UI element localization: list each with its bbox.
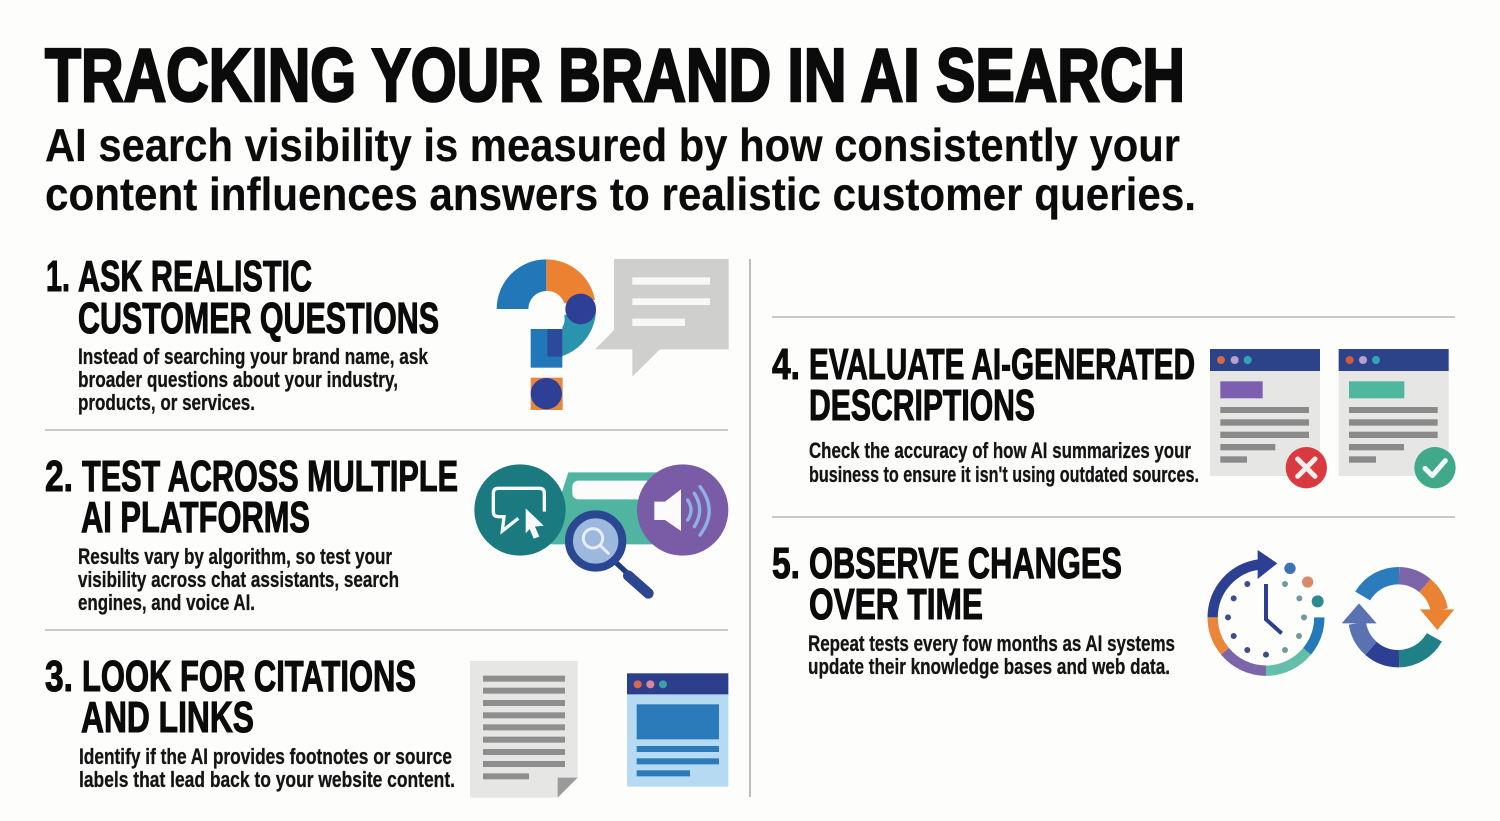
heading: step 2: 2. [45,452,73,501]
heading: step 4 [772,340,1195,430]
heading: step 2: AI PLATFORMS [81,493,310,542]
heading: step 1: CUSTOMER QUESTIONS [78,294,439,343]
heading: step 5: OVER TIME [809,580,983,629]
text: step 2 description: visibility across chat assistants, search [78,567,399,592]
panel: step 3 look for citations and links [45,652,728,798]
heading: step 1 [46,252,439,343]
heading: step 4: 4. [772,340,800,389]
title: TRACKING YOUR BRAND IN AI SEARCH [45,33,1185,117]
icon: refresh cycle arrows [1342,576,1454,659]
text: step 5 description: Repeat tests every fow months as AI systems [808,631,1175,656]
heading: step 1: ASK REALISTIC [78,252,312,301]
text: step 3 description: Identify if the AI provides footnotes or source [79,744,452,769]
heading: step 4: DESCRIPTIONS [809,381,1035,430]
icon: incorrect description window [1210,349,1327,488]
heading: step 5: OBSERVE CHANGES [809,539,1122,588]
heading: step 3: 3. [45,652,73,701]
icon: blue website window [627,673,728,787]
text: step 4 description [809,438,1199,487]
icon: clock with circular arrow [1213,550,1324,671]
subtitle: AI search visibility is measured by how consistently your [45,119,1180,171]
panel: step 5 observe changes over time [772,539,1454,679]
heading: step 4: EVALUATE AI-GENERATED [809,340,1195,389]
icon: document with text lines [470,661,578,798]
text: step 3 description: labels that lead back to your website content. [79,767,455,792]
icon: question mark and speech bubble [497,259,729,410]
icon: correct description window [1339,349,1456,488]
text: step 1 description: broader questions about your industry, [78,367,398,392]
text: step 3 description [79,744,455,792]
heading: step 3: LOOK FOR CITATIONS [82,652,416,701]
text: step 2 description [78,544,399,615]
panel: step 4 evaluate AI-generated descriptions [772,340,1456,488]
heading: step 1: 1. [46,252,70,301]
icon: chat, search and voice platforms [474,464,728,593]
heading: step 2: TEST ACROSS MULTIPLE [82,452,458,501]
text: step 1 description [78,344,429,415]
text: step 2 description: Results vary by algorithm, so test your [78,544,392,569]
text: step 1 description: products, or services. [78,390,255,415]
text: step 5 description: update their knowledge bases and web data. [808,654,1170,679]
panel: step 2 test across multiple AI platforms [45,452,728,615]
panel: step 1 ask realistic customer questions [46,252,729,415]
heading: step 5: 5. [772,539,800,588]
subtitle [45,119,1196,220]
heading: step 3 [45,652,416,742]
text: step 1 description: Instead of searching your brand name, ask [78,344,429,369]
text: step 4 description: business to ensure it isn't using outdated sources. [809,462,1199,487]
heading: step 2 [45,452,458,542]
subtitle: content influences answers to realistic customer queries. [45,168,1196,220]
text: step 2 description: engines, and voice AI. [78,590,255,615]
text: step 4 description: Check the accuracy of how AI summarizes your [809,438,1191,463]
heading: step 3: AND LINKS [81,693,254,742]
heading: step 5 [772,539,1122,629]
text: step 5 description [808,631,1175,679]
